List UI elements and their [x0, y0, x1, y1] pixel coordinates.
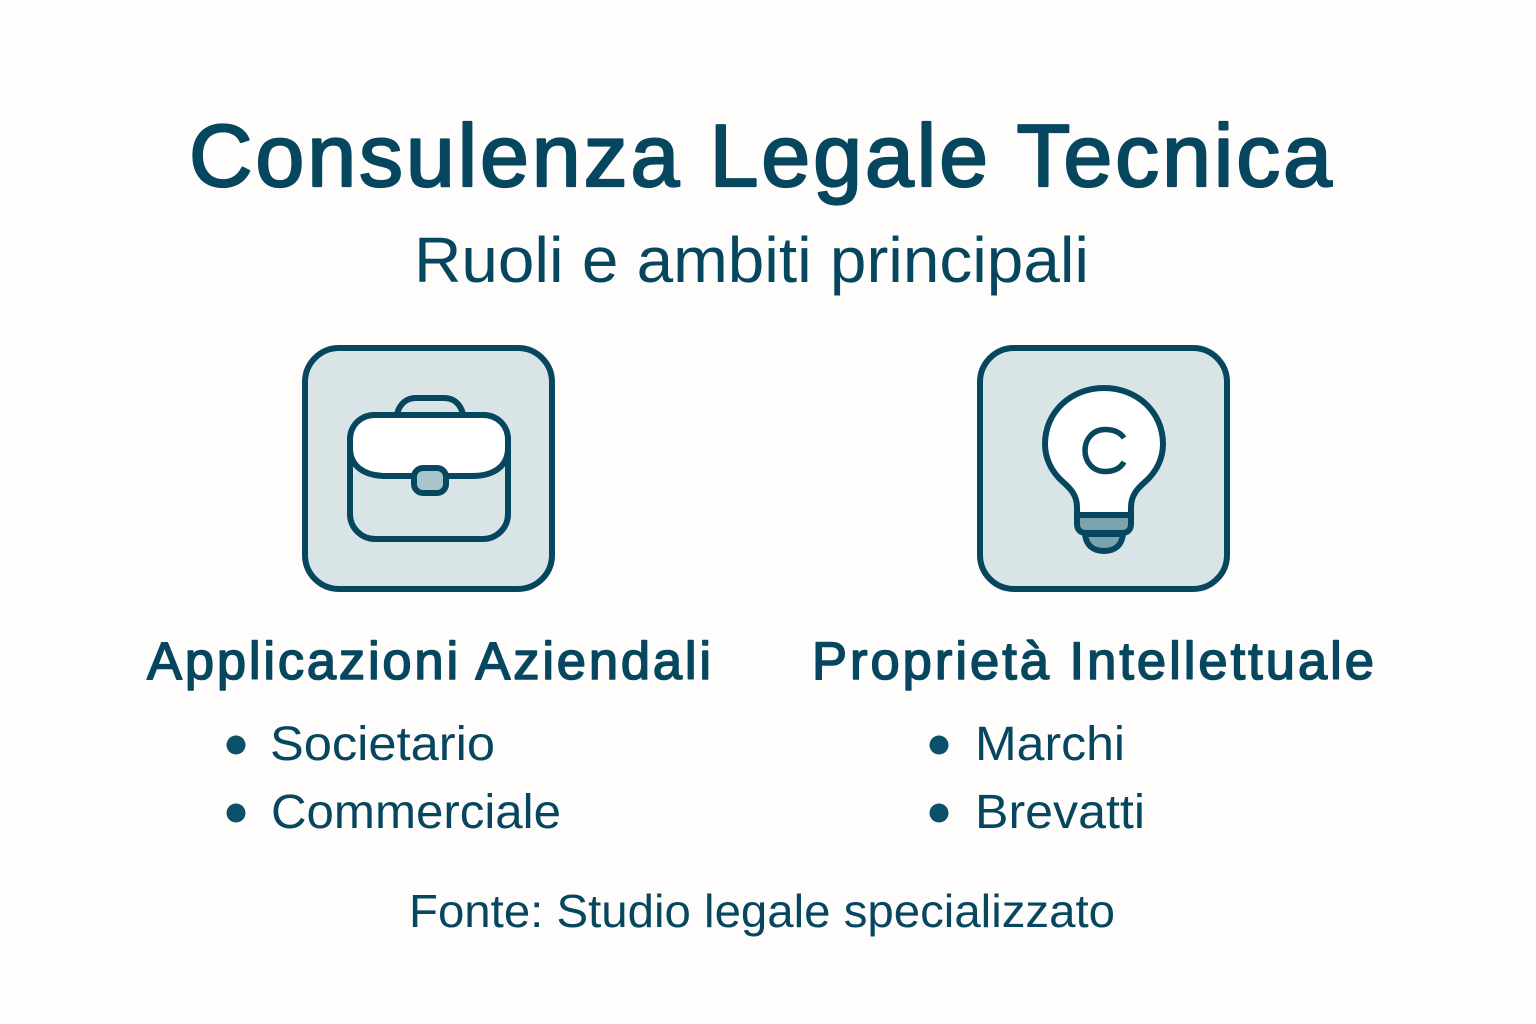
heading: proprietà intellettuale: Proprietà Intellettuale	[812, 632, 1374, 691]
heading: applicazioni aziendali: Applicazioni Aziendali	[147, 632, 711, 691]
icon: light bulb with C	[980, 348, 1227, 589]
panel: applicazioni aziendali	[147, 348, 711, 839]
panel: proprietà intellettuale	[812, 348, 1374, 839]
subtitle: Ruoli e ambiti principali	[414, 224, 1089, 296]
source note: Fonte: Studio legale specializzato	[409, 885, 1115, 937]
icon: briefcase clasp	[414, 468, 446, 493]
list: proprietà intellettuale: Marchi	[975, 718, 1125, 771]
list: proprietà intellettuale: Brevatti	[975, 786, 1145, 839]
list: applicazioni aziendali: Societario	[270, 718, 495, 771]
icon: briefcase	[305, 348, 552, 589]
list: applicazioni aziendali: Commerciale	[271, 786, 561, 839]
title: Consulenza Legale Tecnica	[189, 106, 1332, 205]
list: applicazioni aziendali	[226, 718, 561, 839]
list: proprietà intellettuale	[930, 718, 1145, 839]
